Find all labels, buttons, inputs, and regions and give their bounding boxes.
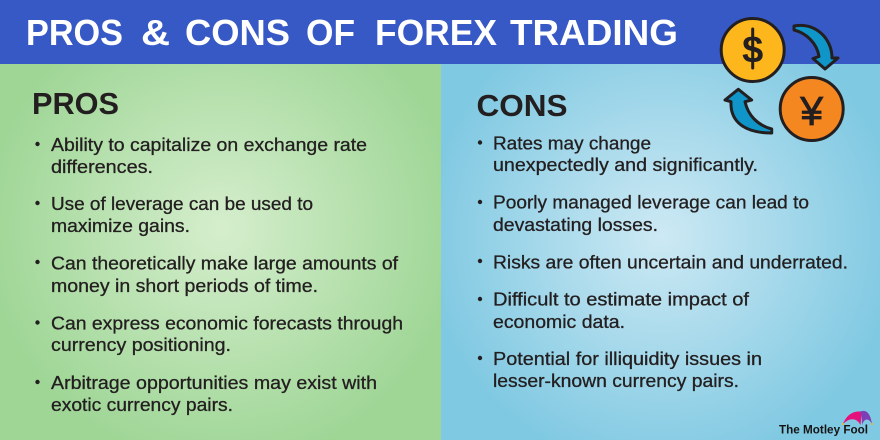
- title: OF: [306, 12, 355, 53]
- cons item 5: Potential for illiquidity issues in: [493, 348, 762, 369]
- icon: currency exchange: [721, 18, 843, 140]
- icon: arrow up left: [725, 89, 772, 133]
- pros item 4: [35, 312, 403, 355]
- title: [26, 12, 678, 53]
- pros item 2: maximize gains.: [51, 215, 190, 236]
- panel: cons background: [441, 64, 880, 440]
- pros item 2: Use of leverage can be used to: [51, 193, 313, 214]
- icon: yen coin: ¥: [799, 88, 823, 134]
- cons item 2: Poorly managed leverage can lead to: [493, 192, 809, 212]
- logo text: The Motley Fool: [779, 424, 868, 436]
- pros item 3: Can theoretically make large amounts of: [51, 252, 399, 274]
- icon: dollar coin: $: [742, 30, 763, 72]
- heading: cons: CONS: [476, 88, 568, 123]
- panel: cons list: [476, 88, 848, 391]
- icon: arrow down right: [794, 25, 838, 69]
- pros item 3: money in short periods of time.: [51, 275, 318, 296]
- cons item 4: Difficult to estimate impact of: [493, 288, 750, 310]
- pros item 4: currency positioning.: [51, 334, 231, 355]
- pros item 5: Arbitrage opportunities may exist with: [51, 372, 377, 393]
- pros item 4: Can express economic forecasts through: [51, 312, 403, 334]
- pros item 5: [35, 372, 377, 415]
- heading: pros: PROS: [32, 86, 119, 121]
- pros item 3: [35, 252, 399, 296]
- title: TRADING: [510, 12, 678, 53]
- logo jester hat: [842, 411, 873, 425]
- title: &: [141, 12, 170, 53]
- title: CONS: [185, 12, 290, 53]
- pros item 1: differences.: [51, 156, 153, 177]
- cons item 4: [478, 288, 750, 332]
- pros item 2: [35, 193, 313, 236]
- cons item 1: unexpectedly and significantly.: [493, 154, 758, 175]
- cons item 3: Risks are often uncertain and underrated.: [493, 252, 848, 272]
- cons item 1: [478, 132, 758, 175]
- pros item 1: [35, 134, 367, 177]
- title banner: [0, 0, 880, 64]
- pros item 1: Ability to capitalize on exchange rate: [51, 134, 367, 155]
- cons item 2: [478, 192, 809, 235]
- panel: pros list: [32, 86, 403, 415]
- cons item 5: [478, 348, 762, 391]
- cons item 2: devastating losses.: [493, 214, 658, 235]
- logo: The Motley Fool: [779, 411, 873, 436]
- title: PROS: [26, 12, 123, 53]
- cons item 4: economic data.: [493, 311, 625, 332]
- cons item 1: Rates may change: [493, 132, 651, 154]
- pros item 5: exotic currency pairs.: [51, 394, 233, 415]
- panel: pros background: [0, 64, 441, 440]
- title: FOREX: [375, 12, 498, 53]
- cons item 5: lesser-known currency pairs.: [493, 370, 739, 391]
